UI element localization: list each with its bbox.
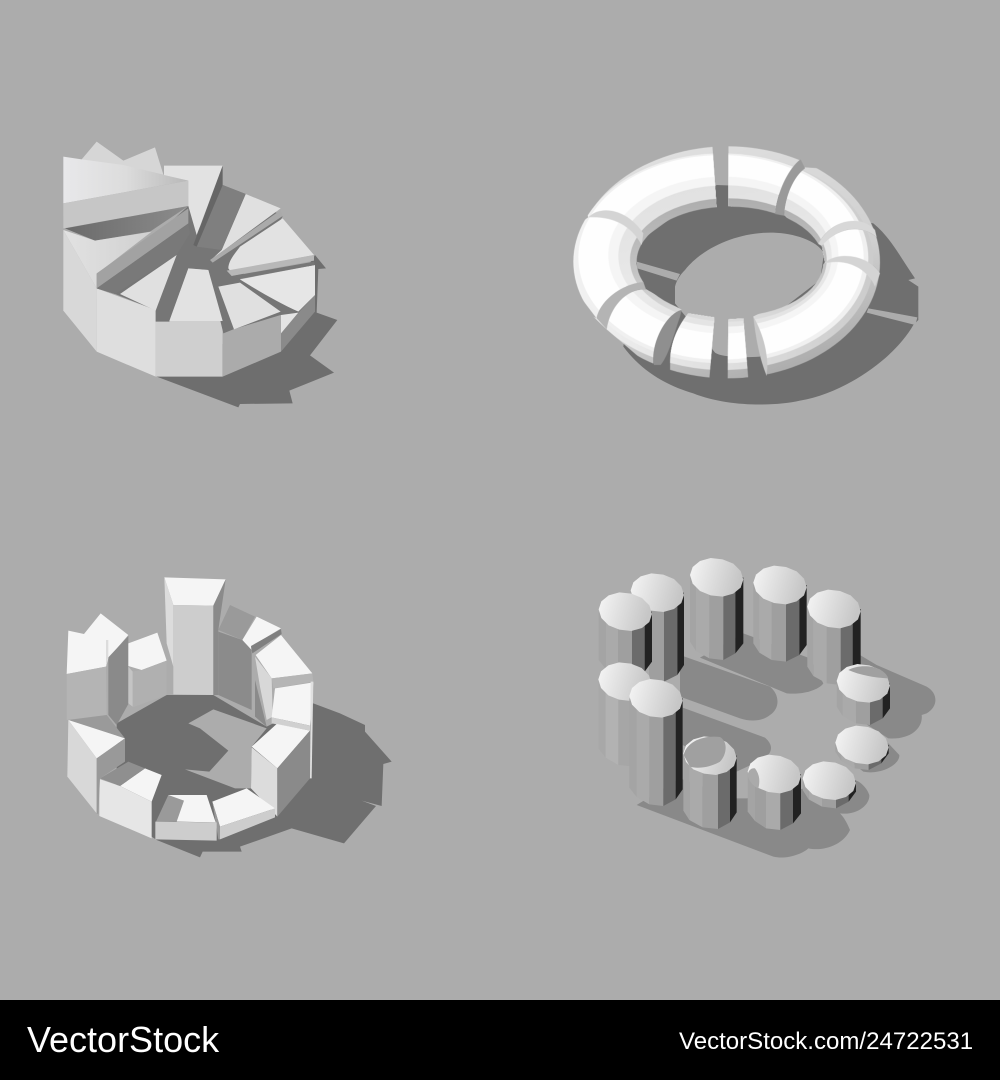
staircase cast shadow (155, 255, 337, 407)
cylinder 1 (631, 593, 684, 682)
cylinder 7 top (835, 726, 889, 764)
cylinder 6 (837, 683, 890, 725)
cylinder 1 top (631, 573, 684, 612)
right lower block (251, 724, 310, 817)
back left tall blocks (67, 613, 128, 725)
cylinder cast shadows (637, 633, 935, 858)
cylinder 5 (807, 609, 861, 685)
cylinder 9 top (748, 755, 801, 793)
panel: cylinder ring chart (598, 558, 935, 858)
ring segment end caps (588, 159, 880, 376)
cylinder 8 top (803, 761, 856, 800)
cylinder 10 top (683, 736, 737, 775)
cylinder 10 (683, 756, 737, 829)
right back block (218, 605, 282, 710)
cylinder 11 (629, 698, 683, 806)
cylinder 2 top (599, 592, 652, 631)
staircase back steps (82, 142, 164, 180)
light stripes in ring shadow (637, 262, 917, 325)
central tall block (164, 577, 226, 695)
panel: block ring chart (67, 577, 392, 857)
left big block (67, 715, 125, 814)
footer bar with watermark (0, 1000, 1000, 1080)
front center block (155, 795, 217, 841)
cylinder 3 (690, 577, 743, 660)
cylinder 2 (599, 612, 652, 678)
cylinder 12 top (598, 662, 652, 701)
cylinder 10 top shadow (684, 737, 726, 768)
cylinder 6 top shadow (848, 666, 888, 678)
panel: spiral staircase chart (63, 142, 337, 407)
cylinder 7 (835, 745, 889, 770)
footer brand name: VectorStock (27, 1019, 219, 1060)
small back block (128, 633, 167, 707)
stair treads and risers (63, 157, 315, 333)
cylinder 3 top (690, 558, 743, 597)
right middle block (272, 682, 313, 778)
cylinder 9 (748, 774, 801, 830)
footer image reference: VectorStock.com/24722531 (679, 1028, 973, 1055)
cylinder 4 (753, 585, 807, 662)
panel: segmented ring chart (573, 146, 918, 405)
front right block (212, 788, 275, 839)
cylinder 5 top (807, 590, 861, 628)
ring cast shadow (623, 185, 918, 405)
blocks cast shadow (117, 695, 392, 857)
cylinder 4 top (753, 566, 807, 604)
staircase central dark core (97, 185, 298, 333)
front left block (99, 762, 162, 838)
cylinder 12 (598, 682, 635, 767)
ground visible through ring (675, 233, 824, 357)
staircase walls (63, 230, 315, 377)
ground inside ring (185, 709, 267, 788)
cylinder 6 top (837, 664, 890, 703)
ring segments (573, 146, 880, 378)
cylinder 9 top shadow (748, 768, 759, 788)
cylinder 8 (803, 781, 856, 808)
cylinder 11 top (629, 679, 683, 718)
right upper block (255, 635, 313, 727)
